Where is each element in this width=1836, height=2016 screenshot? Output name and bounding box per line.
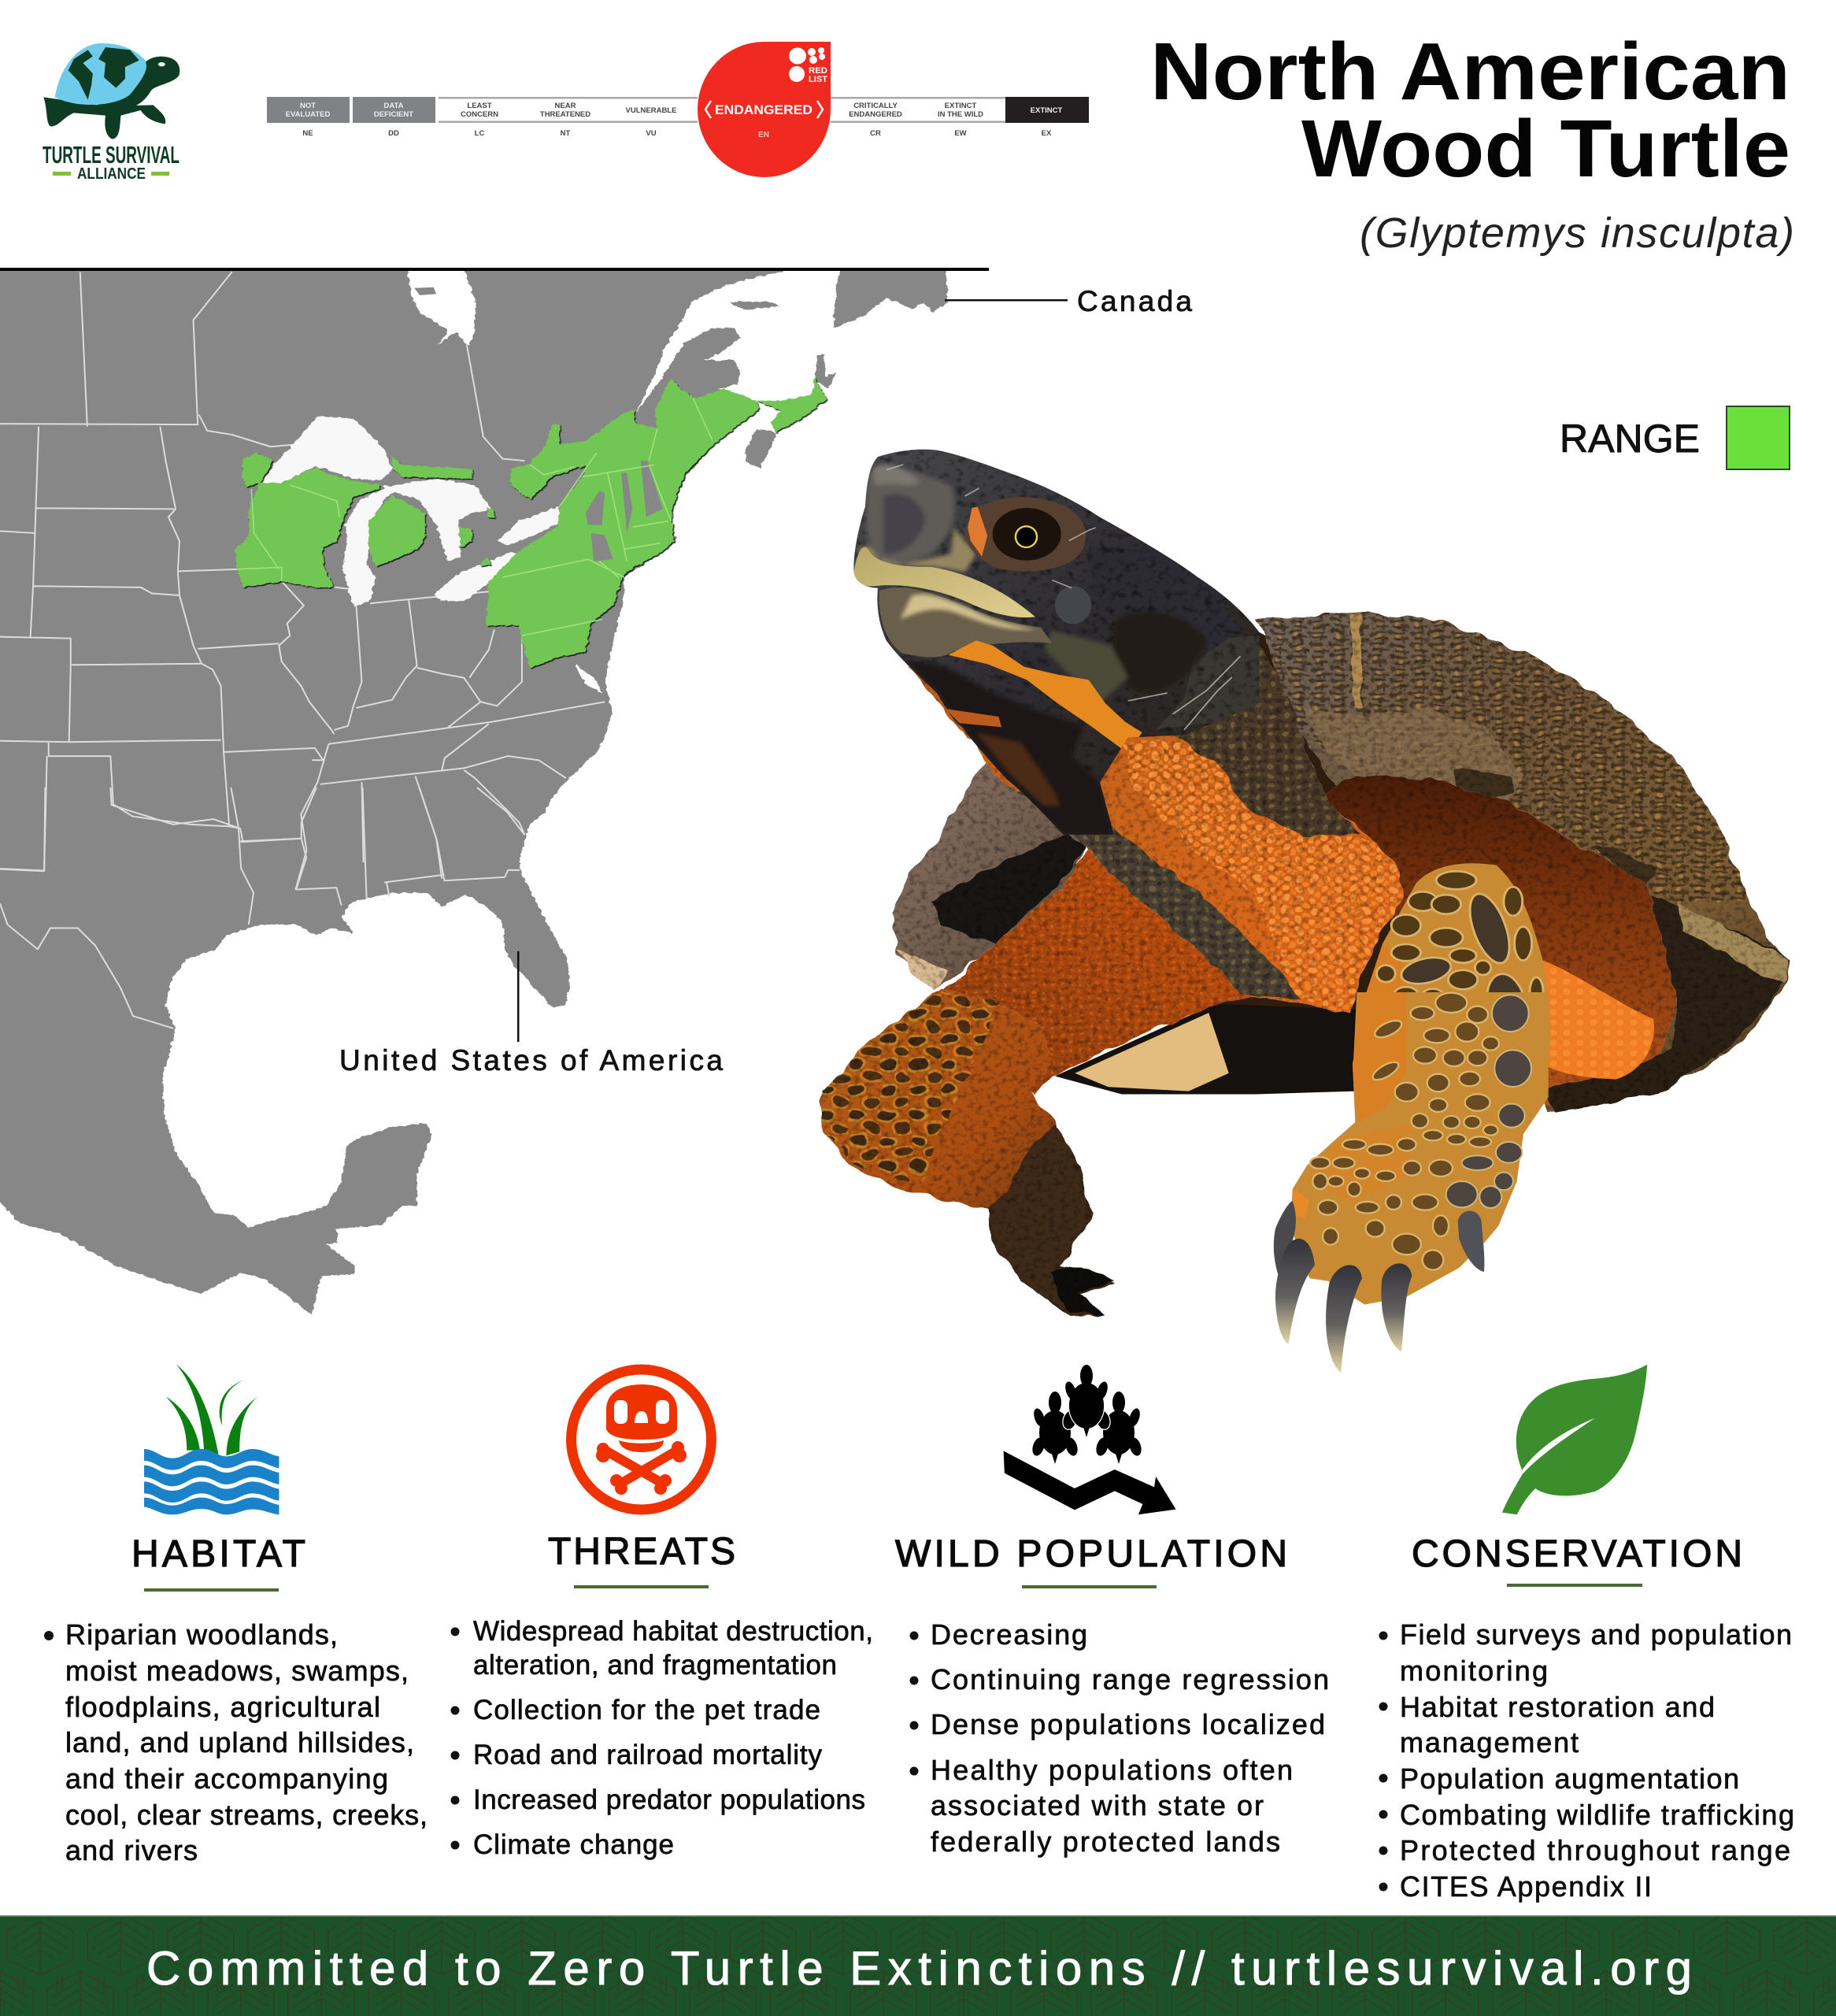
- status: low risk group: VULNERABLE: [626, 106, 676, 115]
- panel: habitat: [44, 1365, 428, 1866]
- head: [847, 441, 1268, 835]
- great lakes and bays: [260, 417, 564, 607]
- heading: wild population: WILD POPULATION: [895, 1533, 1287, 1575]
- title: North American: [1150, 26, 1790, 117]
- claws: [1274, 1201, 1484, 1373]
- wild population text: associated with state or: [931, 1789, 1264, 1821]
- status: not evaluated: EVALUATED: [286, 110, 330, 119]
- footer tagline: Committed to Zero Turtle Extinctions // turtlesurvival.org: [146, 1942, 1692, 1995]
- icon: logo turtle: [43, 43, 180, 139]
- heading: conservation: CONSERVATION: [1412, 1533, 1742, 1575]
- habitat text: floodplains, agricultural: [65, 1691, 380, 1723]
- status: low risk group: VU: [646, 129, 657, 138]
- top divider line: [0, 268, 989, 271]
- status: low risk group: CONCERN: [461, 110, 498, 119]
- threats text: Road and railroad mortality: [473, 1740, 822, 1770]
- wild population text: Dense populations localized: [931, 1708, 1325, 1740]
- logo wordmark: TURTLE SURVIVAL: [43, 141, 180, 169]
- land: northern and eastern states: [0, 260, 948, 890]
- habitat text: land, and upland hillsides,: [65, 1726, 414, 1758]
- state and province borders: [0, 272, 605, 890]
- habitat text: [44, 1618, 428, 1866]
- conservation text: monitoring: [1400, 1655, 1548, 1687]
- status: high risk group: ENDANGERED: [849, 110, 902, 119]
- lakes, state lines and range: [0, 260, 827, 890]
- habitat text: and their accompanying: [65, 1762, 388, 1795]
- logo: Turtle Survival Alliance: [43, 43, 180, 183]
- threats text: alteration, and fragmentation: [473, 1650, 837, 1681]
- green species range: [235, 379, 827, 668]
- conservation text: Combating wildlife trafficking: [1400, 1799, 1794, 1831]
- logo wordmark: ALLIANCE: [77, 165, 146, 183]
- threats text: Collection for the pet trade: [473, 1695, 820, 1725]
- belly skin: [941, 847, 1269, 1094]
- shell rear dark margin: [1546, 895, 1790, 1112]
- land: gulf coast and Mexico: [0, 788, 570, 1315]
- status: endangered highlight: [698, 42, 831, 177]
- icon: skull and crossbones: [572, 1369, 712, 1510]
- status: extinct: EXTINCT: [1031, 106, 1063, 115]
- scientific name: (Glyptemys insculpta): [1360, 209, 1794, 257]
- status: data deficient: DD: [388, 129, 399, 138]
- left front leg: [820, 989, 1115, 1314]
- gaps in the range: [586, 461, 663, 561]
- wild population text: federally protected lands: [931, 1825, 1280, 1858]
- conservation text: management: [1400, 1726, 1579, 1758]
- status: data deficient: DATA: [384, 102, 404, 110]
- status: data deficient: [353, 97, 435, 138]
- right front paw: [1274, 992, 1549, 1373]
- panel: wild population: [895, 1365, 1329, 1858]
- carapace: [1256, 612, 1790, 1112]
- icon: declining turtles: [1004, 1365, 1176, 1514]
- threats text: Climate change: [473, 1829, 674, 1860]
- threats text: [450, 1616, 873, 1860]
- shell cavity: [1323, 775, 1677, 1106]
- shell left side: [891, 757, 1085, 991]
- conservation text: [1379, 1618, 1794, 1903]
- status: high risk group: IN THE WILD: [938, 110, 983, 119]
- status: low risk group: NEAR: [555, 102, 576, 110]
- habitat text: moist meadows, swamps,: [65, 1655, 409, 1687]
- label: Canada: Canada: [1077, 285, 1192, 317]
- hind leg orange: [1530, 955, 1654, 1079]
- status: high risk group: CRITICALLY: [853, 102, 898, 110]
- heading: threats: THREATS: [548, 1531, 735, 1573]
- turtle illustration: [820, 441, 1790, 1373]
- conservation text: Population augmentation: [1400, 1762, 1739, 1795]
- right front leg upper: [1353, 863, 1551, 1166]
- wild population text: Healthy populations often: [931, 1754, 1293, 1786]
- logo wordmark: [43, 141, 180, 183]
- title: Wood Turtle: [1301, 103, 1790, 194]
- status: not evaluated: NE: [302, 129, 313, 138]
- status: low risk group: NT: [561, 129, 571, 138]
- map of eastern North America: [0, 260, 948, 1315]
- habitat text: cool, clear streams, creeks,: [65, 1799, 428, 1831]
- status: high risk group: CR: [870, 129, 881, 138]
- status: not evaluated: [267, 97, 350, 138]
- status: endangered highlight: EN: [758, 131, 769, 139]
- status: low risk group: LC: [475, 129, 484, 138]
- threats text: Widespread habitat destruction,: [473, 1616, 873, 1647]
- conservation text: Field surveys and population: [1400, 1618, 1792, 1651]
- wild population text: [910, 1618, 1329, 1858]
- heading: habitat: HABITAT: [131, 1533, 305, 1575]
- panel: conservation: [1379, 1365, 1794, 1903]
- status: endangered highlight: RED: [809, 66, 827, 76]
- status: endangered highlight: ENDANGERED: [715, 102, 813, 117]
- conservation text: Habitat restoration and: [1400, 1691, 1715, 1723]
- icon: leaf: [1502, 1365, 1647, 1514]
- neck: [908, 643, 1403, 1013]
- wild population text: Decreasing: [931, 1618, 1087, 1651]
- status: not evaluated: NOT: [300, 102, 316, 110]
- status: high risk group: EW: [954, 129, 967, 138]
- status: high risk group: EXTINCT: [945, 102, 977, 110]
- conservation text: CITES Appendix II: [1400, 1870, 1652, 1903]
- label: United States of America: United States of America: [339, 1044, 723, 1077]
- status: low risk group: [439, 97, 698, 138]
- status: extinct: [1005, 97, 1089, 138]
- status: low risk group: THREATENED: [540, 110, 590, 119]
- status: data deficient: DEFICIENT: [374, 110, 413, 119]
- footer banner: [0, 1915, 1836, 2016]
- legend: range: RANGE: [1560, 417, 1700, 461]
- threats text: Increased predator populations: [473, 1784, 865, 1815]
- status: endangered highlight: LIST: [809, 75, 827, 84]
- habitat text: and rivers: [65, 1834, 198, 1866]
- status: extinct: EX: [1042, 129, 1052, 138]
- panel: threats: [450, 1369, 873, 1860]
- plastron: [1055, 1004, 1363, 1094]
- status: low risk group: LEAST: [467, 102, 492, 110]
- legend: range: [1560, 406, 1790, 469]
- backing under neck and legs: [1082, 630, 1550, 1088]
- habitat text: Riparian woodlands,: [65, 1618, 338, 1651]
- status: high risk group: [831, 97, 1005, 138]
- icon: grass and water: [144, 1365, 279, 1514]
- wild population text: Continuing range regression: [931, 1663, 1329, 1695]
- IUCN red list status scale: [267, 42, 1089, 177]
- title: [1150, 26, 1790, 194]
- conservation text: Protected throughout range: [1400, 1834, 1790, 1866]
